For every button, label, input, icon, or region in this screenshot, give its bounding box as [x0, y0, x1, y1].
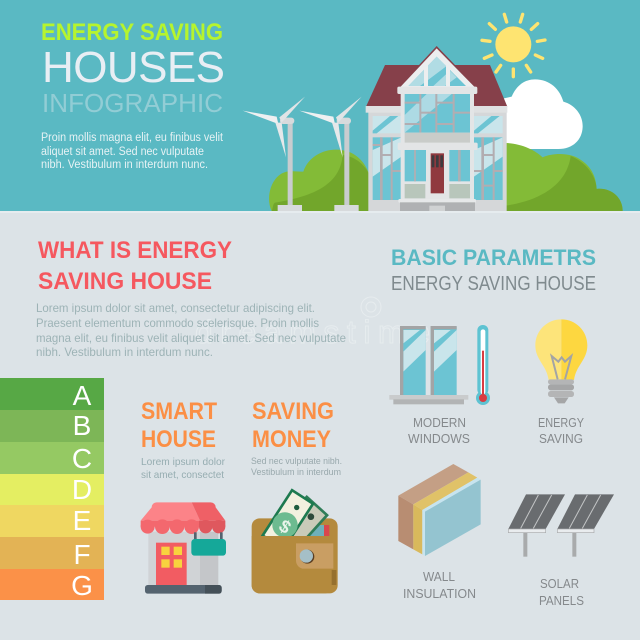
icon: thermometer [476, 325, 490, 405]
walls [368, 107, 507, 211]
icon: house [366, 46, 507, 211]
heading: what is energy saving house: WHAT IS ENERGY [38, 237, 232, 264]
strip under header [0, 211, 640, 213]
heading: saving money: SAVING [252, 398, 334, 425]
panel: energy saving [535, 319, 587, 446]
label: energy saving [538, 415, 584, 446]
watermark [195, 297, 430, 350]
title: energy saving houses: HOUSES [42, 43, 225, 92]
chart: energy rating scale: A [73, 380, 92, 411]
header text block: aliquet sit amet. Sed nec vulputate [41, 146, 204, 158]
label: modern windows [408, 415, 470, 446]
chart: energy rating scale [0, 378, 104, 601]
intro text block: Lorem ipsum dolor sit amet, consectetur adipiscing elit. [36, 301, 315, 315]
intro text block [36, 301, 346, 359]
smart house text [141, 456, 225, 481]
panel: header [0, 0, 640, 211]
label: energy saving: SAVING [539, 431, 583, 446]
heading: what is energy saving house: SAVING HOUSE [38, 268, 212, 295]
icon: light bulb [535, 319, 587, 403]
central tower [401, 90, 474, 203]
intro text block: nibh. Vestibulum in interdum nunc. [36, 345, 213, 359]
chart: energy rating scale: G [71, 570, 93, 601]
panel: saving money [251, 398, 342, 593]
icon: wind turbine 2 [299, 97, 362, 211]
heading: basic parameters: BASIC PARAMETRS [391, 245, 596, 270]
saving money text [251, 456, 342, 478]
label: wall insulation: INSULATION [403, 586, 476, 601]
label: modern windows: WINDOWS [408, 431, 470, 446]
steps [398, 199, 476, 211]
heading: saving money [252, 398, 334, 453]
heading: basic parameters: ENERGY SAVING HOUSE [391, 273, 596, 295]
label: modern windows: MODERN [413, 415, 466, 430]
icon: cloud [497, 79, 583, 149]
upper tower window [405, 94, 470, 133]
chart: energy rating scale: C [72, 443, 92, 474]
label: wall insulation: WALL [423, 569, 455, 584]
icon: window [389, 326, 468, 404]
intro text block: magna elit, eu finibus velit aliquet sit amet. Sed nec vulputate [36, 331, 346, 345]
icon: sun [482, 14, 545, 77]
label: energy saving: ENERGY [538, 415, 584, 430]
heading: basic parameters [391, 245, 596, 295]
icon: wall layers [398, 464, 481, 556]
heading: what is energy saving house [38, 237, 232, 295]
label: wall insulation [403, 569, 476, 601]
label: solar panels [539, 576, 584, 608]
heading: smart house: SMART [141, 398, 217, 425]
intro text block: Praesent elementum commodo scelerisque. Proin mollis [36, 316, 319, 330]
saving money text: Sed nec vulputate nibh. [251, 456, 342, 467]
icon: right bushes [503, 143, 623, 211]
icon: shop house [141, 502, 226, 594]
panel: modern windows [389, 325, 490, 446]
icon: wallet with cash: $ [275, 516, 295, 538]
lower tower windows [405, 150, 470, 198]
header text block [41, 132, 224, 171]
icon: left bushes [269, 150, 370, 211]
panel: wall insulation [398, 464, 481, 601]
title: energy saving houses [41, 19, 225, 118]
panel: smart house [141, 398, 226, 594]
door [431, 153, 444, 193]
icon: wind turbine 1 [243, 97, 305, 211]
panel: solar panels [508, 494, 614, 608]
label: solar panels: SOLAR [540, 576, 579, 591]
title: energy saving houses: ENERGY SAVING [41, 19, 223, 46]
header text block: nibh. Vestibulum in interdum nunc. [41, 159, 208, 171]
heading: saving money: MONEY [252, 426, 331, 453]
icon: solar panels [508, 494, 614, 557]
title: energy saving houses: INFOGRAPHIC [42, 88, 223, 118]
smart house text: sit amet, consectet [141, 469, 224, 481]
illustration: house scene [243, 14, 623, 211]
chart: energy rating scale: B [73, 410, 91, 441]
chart: energy rating scale: D [72, 474, 92, 505]
side windows [373, 116, 503, 200]
heading: smart house: HOUSE [141, 426, 216, 453]
heading: smart house [141, 398, 217, 453]
roof [366, 65, 507, 107]
saving money text: Vestibulum in interdum [251, 467, 341, 478]
chart: energy rating scale: E [73, 505, 91, 536]
chart: energy rating scale: F [73, 539, 91, 570]
balcony [405, 133, 470, 143]
icon: wallet with cash [252, 488, 338, 593]
smart house text: Lorem ipsum dolor [141, 456, 225, 468]
gable window [397, 48, 477, 94]
watermark: dreamstime [195, 314, 430, 350]
label: solar panels: PANELS [539, 593, 584, 608]
header text block: Proin mollis magna elit, eu finibus velit [41, 132, 224, 144]
